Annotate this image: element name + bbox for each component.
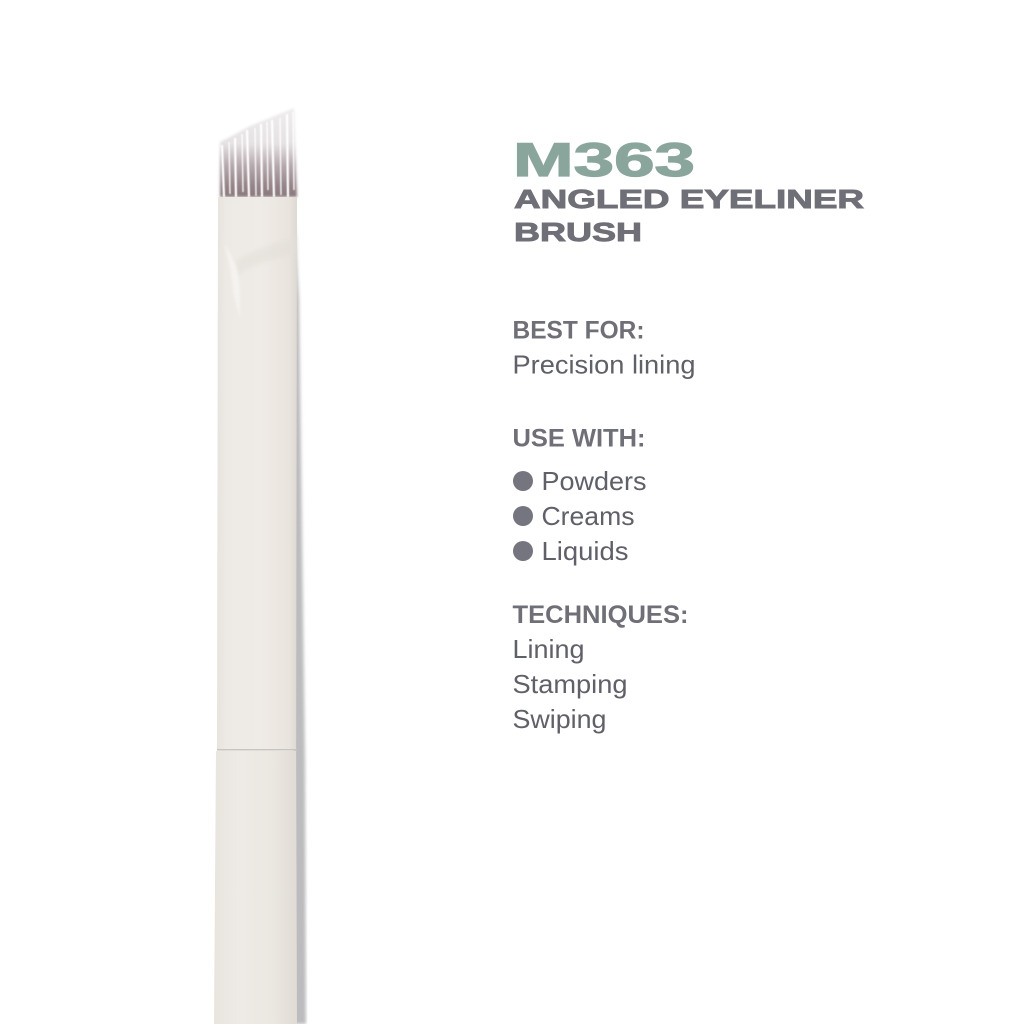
brush ferrule xyxy=(217,197,297,750)
brush shadow xyxy=(294,225,306,1024)
section: techniques: Lining xyxy=(512,634,584,664)
subtitle: product name line one: ANGLED EYELINER xyxy=(514,184,864,214)
section: use with: Powders xyxy=(542,466,646,496)
subtitle: product name line two: BRUSH xyxy=(514,217,642,247)
section: best for: BEST FOR: xyxy=(512,316,644,344)
section: use with: USE WITH: xyxy=(512,424,646,452)
icon: angled eyeliner brush xyxy=(214,108,306,1024)
section: use with: Creams xyxy=(542,501,634,531)
section: techniques xyxy=(512,601,688,734)
section: best for: Precision lining xyxy=(512,350,696,380)
section: techniques: Stamping xyxy=(512,669,628,699)
section: techniques: TECHNIQUES: xyxy=(512,601,688,629)
handle seam xyxy=(217,749,297,751)
section: use with xyxy=(512,424,646,566)
ferrule highlight xyxy=(224,243,240,320)
brush bristles xyxy=(220,108,297,197)
section: use with: Liquids xyxy=(542,536,628,566)
brush handle xyxy=(214,751,297,1024)
section: best for xyxy=(512,316,696,380)
title: product code: M363 xyxy=(513,133,695,186)
ferrule crimp shading xyxy=(236,236,296,275)
section: techniques: Swiping xyxy=(512,704,606,734)
